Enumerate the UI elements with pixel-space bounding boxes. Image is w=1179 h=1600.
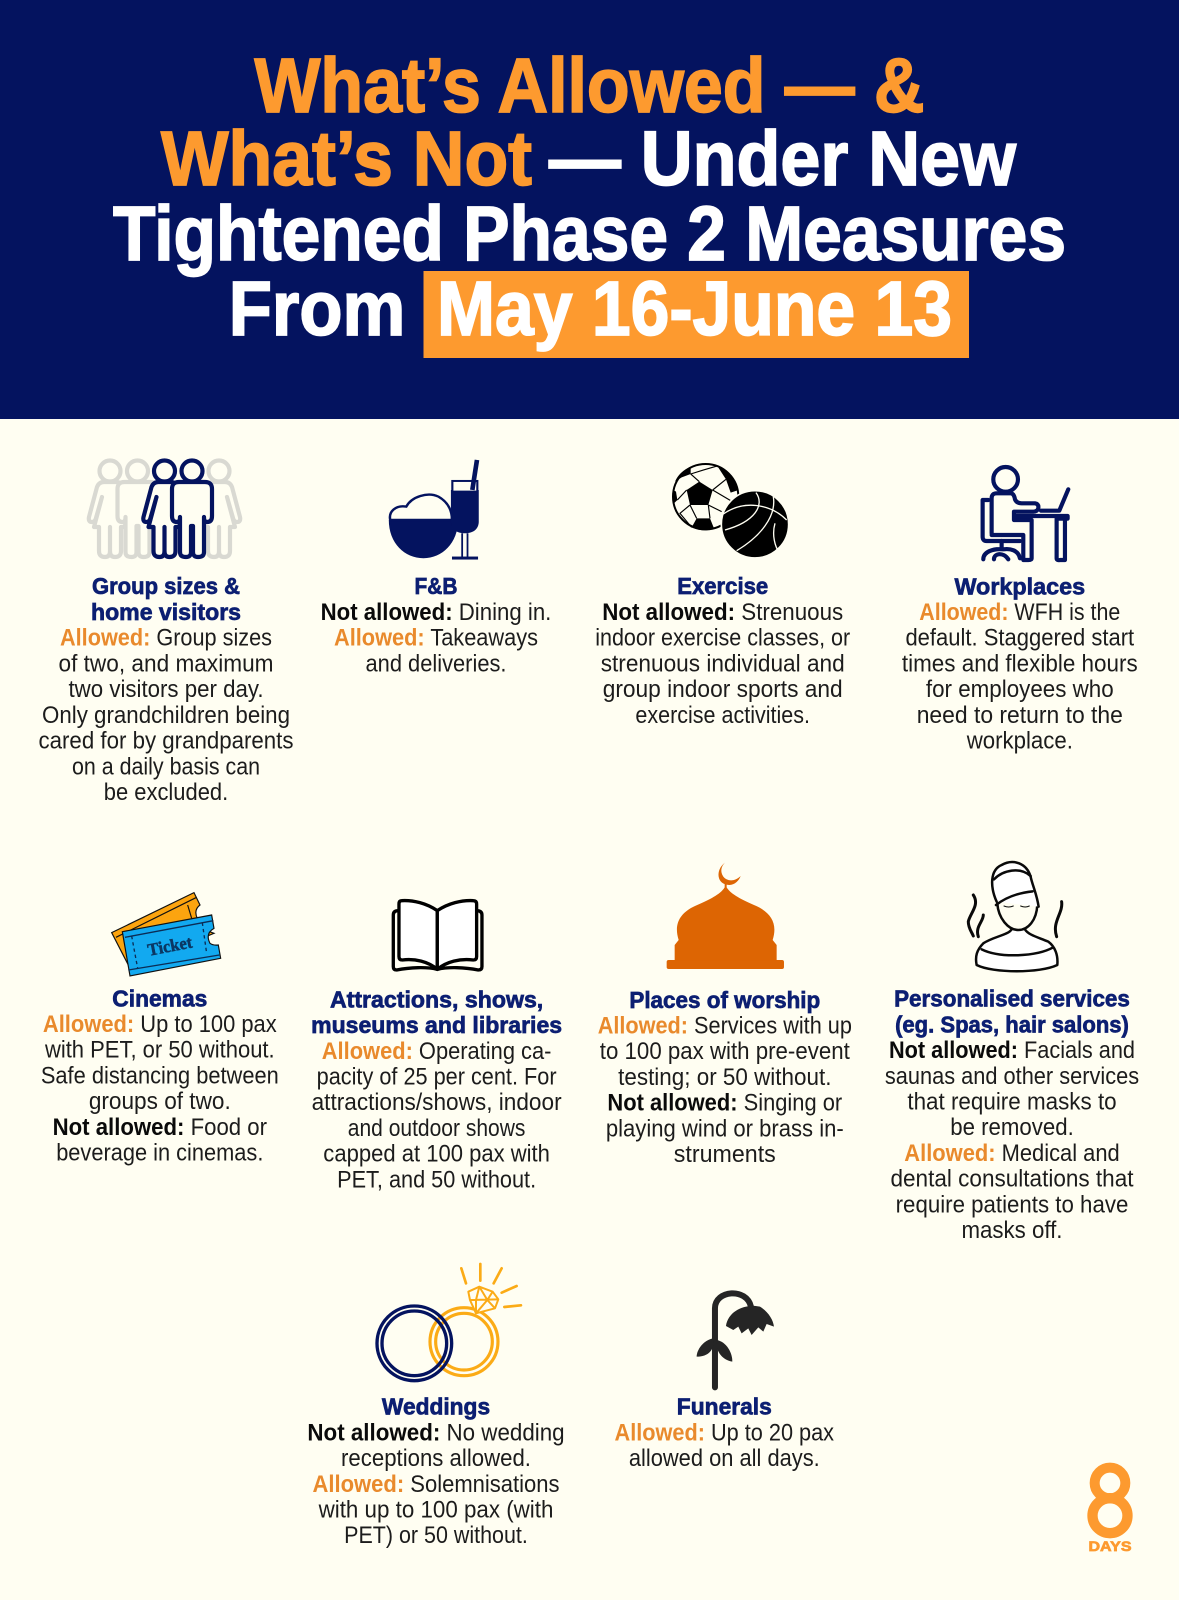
heading and text: with up to 100 pax (with (318, 1496, 553, 1524)
heading and text: Allowed: Up to 100 pax (43, 1011, 277, 1038)
title: What’s Not (161, 116, 532, 202)
heading and text: Weddings (382, 1394, 490, 1420)
heading and text: on a daily basis can (72, 753, 260, 780)
heading and text: Cinemas (112, 985, 207, 1011)
heading and text (38, 573, 294, 806)
panel: places of worship (598, 863, 852, 1168)
heading and text: struments (674, 1141, 776, 1168)
header banner (0, 0, 1179, 419)
heading and text: Attractions, shows, (330, 986, 543, 1012)
icon: open book (393, 901, 482, 970)
heading and text: Exercise (677, 573, 768, 599)
heading and text: Allowed: Operating ca- (322, 1038, 551, 1065)
heading and text: attractions/shows, indoor (312, 1089, 562, 1116)
heading and text (902, 574, 1138, 754)
icon: soccer ball and basketball (673, 464, 789, 558)
icon: wilted flower (697, 1293, 774, 1387)
panel: group sizes and home visitors (38, 460, 294, 806)
icon: person at desk (983, 467, 1068, 560)
heading and text: Allowed: Takeaways (334, 624, 538, 652)
panel: workplaces (902, 467, 1138, 754)
heading and text: times and flexible hours (902, 650, 1138, 677)
heading and text: receptions allowed. (341, 1445, 531, 1472)
heading and text: pacity of 25 per cent. For (317, 1064, 557, 1090)
heading and text: Allowed: Services with up (598, 1012, 852, 1039)
heading and text: be excluded. (104, 779, 228, 806)
heading and text: Not allowed: Singing or (607, 1090, 842, 1117)
heading and text: that require masks to (907, 1088, 1117, 1115)
heading and text: beverage in cinemas. (56, 1140, 263, 1166)
heading and text: two visitors per day. (68, 676, 264, 703)
heading and text: and outdoor shows (348, 1115, 525, 1142)
panel: exercise (595, 464, 850, 729)
heading and text: default. Staggered start (905, 624, 1134, 652)
heading and text (307, 1394, 565, 1549)
heading and text: indoor exercise classes, or (595, 624, 850, 652)
heading and text: saunas and other services (885, 1063, 1139, 1090)
heading and text: strenuous individual and (601, 650, 845, 677)
heading and text: cared for by grandparents (38, 728, 294, 754)
panel: funerals (615, 1293, 834, 1472)
heading and text: playing wind or brass in- (606, 1115, 844, 1142)
heading and text: Personalised services (894, 986, 1130, 1012)
heading and text: with PET, or 50 without. (44, 1037, 275, 1064)
heading and text: be removed. (950, 1114, 1074, 1141)
heading and text: Allowed: Solemnisations (312, 1471, 560, 1498)
icon: bowl and drink (389, 460, 479, 560)
heading and text: Not allowed: Food or (53, 1114, 267, 1141)
heading and text: Safe distancing between (41, 1062, 279, 1089)
heading and text: Not allowed: Strenuous (602, 599, 843, 626)
heading and text: Allowed: Up to 20 pax (615, 1419, 834, 1446)
heading and text: group indoor sports and (603, 676, 843, 703)
heading and text: allowed on all days. (629, 1445, 820, 1472)
heading and text: workplace. (966, 728, 1073, 754)
heading and text: Not allowed: Facials and (889, 1037, 1135, 1064)
heading and text: exercise activities. (635, 702, 810, 729)
icon: tickets (112, 893, 221, 976)
heading and text (598, 987, 852, 1168)
icon: wedding rings (377, 1264, 521, 1381)
heading and text (615, 1394, 834, 1472)
heading and text: (eg. Spas, hair salons) (895, 1011, 1129, 1037)
heading and text: museums and libraries (311, 1012, 562, 1038)
heading and text: for employees who (926, 676, 1114, 703)
heading and text: Allowed: WFH is the (919, 599, 1120, 626)
heading and text: and deliveries. (366, 650, 506, 677)
heading and text: capped at 100 pax with (323, 1141, 550, 1168)
heading and text: groups of two. (89, 1088, 231, 1115)
heading and text (885, 986, 1139, 1244)
heading and text: Only grandchildren being (42, 702, 290, 729)
heading and text: masks off. (962, 1217, 1062, 1244)
heading and text: need to return to the (917, 702, 1123, 729)
title: May 16-June 13 (437, 266, 952, 352)
icon: mosque dome (667, 863, 784, 969)
panel: cinemas (41, 893, 279, 1166)
heading and text: PET) or 50 without. (344, 1522, 528, 1549)
icon: person with towel and steam (968, 862, 1062, 971)
heading and text: Group sizes & (92, 573, 240, 599)
heading and text (321, 573, 551, 677)
title: — Under New (549, 116, 1017, 202)
heading and text: home visitors (91, 599, 241, 625)
heading and text: dental consultations that (890, 1166, 1134, 1193)
heading and text (595, 573, 850, 729)
panel: personalised services (885, 862, 1139, 1244)
heading and text: PET, and 50 without. (337, 1166, 536, 1193)
heading and text: require patients to have (896, 1191, 1128, 1218)
heading and text: testing; or 50 without. (618, 1064, 831, 1091)
title (113, 43, 1066, 358)
title: What’s Allowed — & (254, 43, 924, 129)
logo: 8 Days (1088, 1468, 1132, 1554)
title: Tightened Phase 2 Measures (113, 191, 1066, 277)
heading and text: F&B (414, 573, 458, 599)
heading and text (311, 986, 562, 1193)
heading and text (41, 985, 279, 1166)
heading and text: Workplaces (954, 574, 1085, 600)
icon: group of people (89, 460, 240, 557)
panel: weddings (307, 1264, 565, 1549)
heading and text: Allowed: Medical and (904, 1140, 1120, 1167)
panel: attractions, shows, museums and libraries (311, 901, 562, 1193)
heading and text: Not allowed: Dining in. (321, 599, 551, 626)
heading and text: to 100 pax with pre-event (600, 1038, 850, 1065)
heading and text: Places of worship (629, 987, 820, 1013)
heading and text: of two, and maximum (58, 650, 274, 677)
panel: F&B (321, 460, 551, 677)
icon: tickets: Ticket (146, 933, 194, 960)
heading and text: Funerals (677, 1394, 772, 1420)
heading and text: Not allowed: No wedding (307, 1419, 565, 1446)
logo: 8 Days: DAYS (1088, 1538, 1132, 1554)
title: From (229, 266, 405, 352)
heading and text: Allowed: Group sizes (60, 624, 272, 652)
